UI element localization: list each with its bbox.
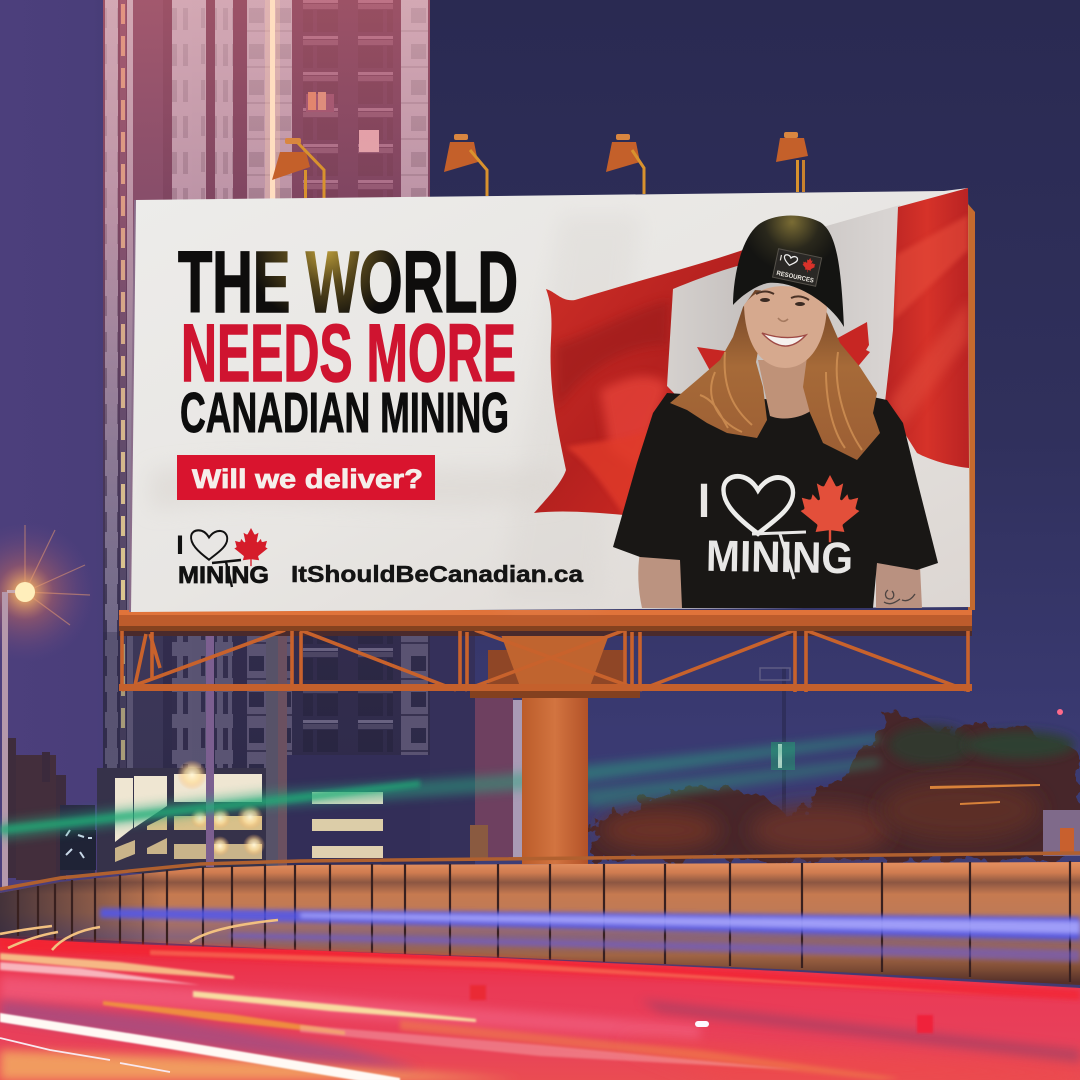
lamp 1 — [272, 138, 324, 198]
telecom tower — [760, 668, 795, 833]
headline line 2: NEEDS MORE — [181, 308, 516, 399]
green light trails — [0, 735, 880, 840]
left arm — [638, 552, 682, 608]
billboard panel — [130, 188, 975, 612]
smile — [762, 333, 806, 346]
catwalk deck — [119, 610, 972, 631]
face — [744, 286, 827, 368]
lamp 4 — [776, 132, 808, 192]
billboard support column — [488, 632, 624, 864]
i love mining logo: I — [176, 530, 184, 560]
red beacon light — [1057, 709, 1063, 715]
lamp 2 — [444, 134, 487, 196]
parking building with lit floors — [97, 760, 267, 873]
lower tower extension and pink wall — [282, 630, 522, 865]
call to action banner — [177, 455, 435, 500]
flag white field — [660, 205, 900, 440]
trees right — [590, 714, 1080, 860]
red road light trails — [0, 920, 1080, 1080]
distant buildings left — [6, 738, 96, 880]
i love mining logo: MINING — [178, 562, 269, 589]
beanie hat — [733, 216, 844, 327]
beanie patch: RESOURCES — [776, 270, 815, 285]
shirt logo: I — [698, 475, 710, 528]
highway barrier — [0, 853, 1080, 985]
shirt logo: MINING — [706, 532, 853, 583]
beanie patch: I — [779, 253, 783, 263]
road surface — [0, 938, 1080, 1080]
poles in front of tower — [206, 632, 287, 907]
barrier panel joints — [18, 861, 1070, 982]
lit office windows — [312, 792, 383, 858]
t-shirt — [613, 393, 938, 608]
billboard frame edge — [968, 204, 975, 610]
tower building — [103, 0, 430, 872]
beanie patch — [773, 249, 822, 286]
call to action banner: Will we deliver? — [192, 464, 423, 494]
right arm — [876, 560, 922, 608]
billboard paper surface — [130, 188, 970, 612]
floodlights on top of billboard — [272, 132, 808, 198]
light streaks — [0, 1013, 400, 1080]
street lamp — [0, 522, 95, 887]
headline — [178, 234, 518, 445]
barrier top rail — [0, 853, 1080, 889]
i love mining logo — [176, 528, 269, 589]
flag left red band — [534, 247, 752, 515]
canadian flag — [534, 188, 969, 515]
headline line 3: CANADIAN MINING — [180, 381, 509, 445]
website url: ItShouldBeCanadian.ca — [291, 561, 583, 587]
tattoo — [884, 590, 915, 604]
neck — [758, 360, 814, 418]
flag right red band — [885, 188, 969, 468]
person — [613, 216, 938, 608]
barrier panels — [0, 862, 1080, 985]
roadside signal box — [470, 810, 1080, 860]
catwalk truss — [119, 628, 972, 698]
lamp 3 — [606, 134, 644, 194]
headline line 1: THE WORLD — [178, 234, 518, 331]
shirt logo — [698, 475, 859, 583]
hair — [670, 290, 880, 460]
flag maple leaf — [697, 322, 870, 395]
blue light trails — [100, 908, 1080, 962]
